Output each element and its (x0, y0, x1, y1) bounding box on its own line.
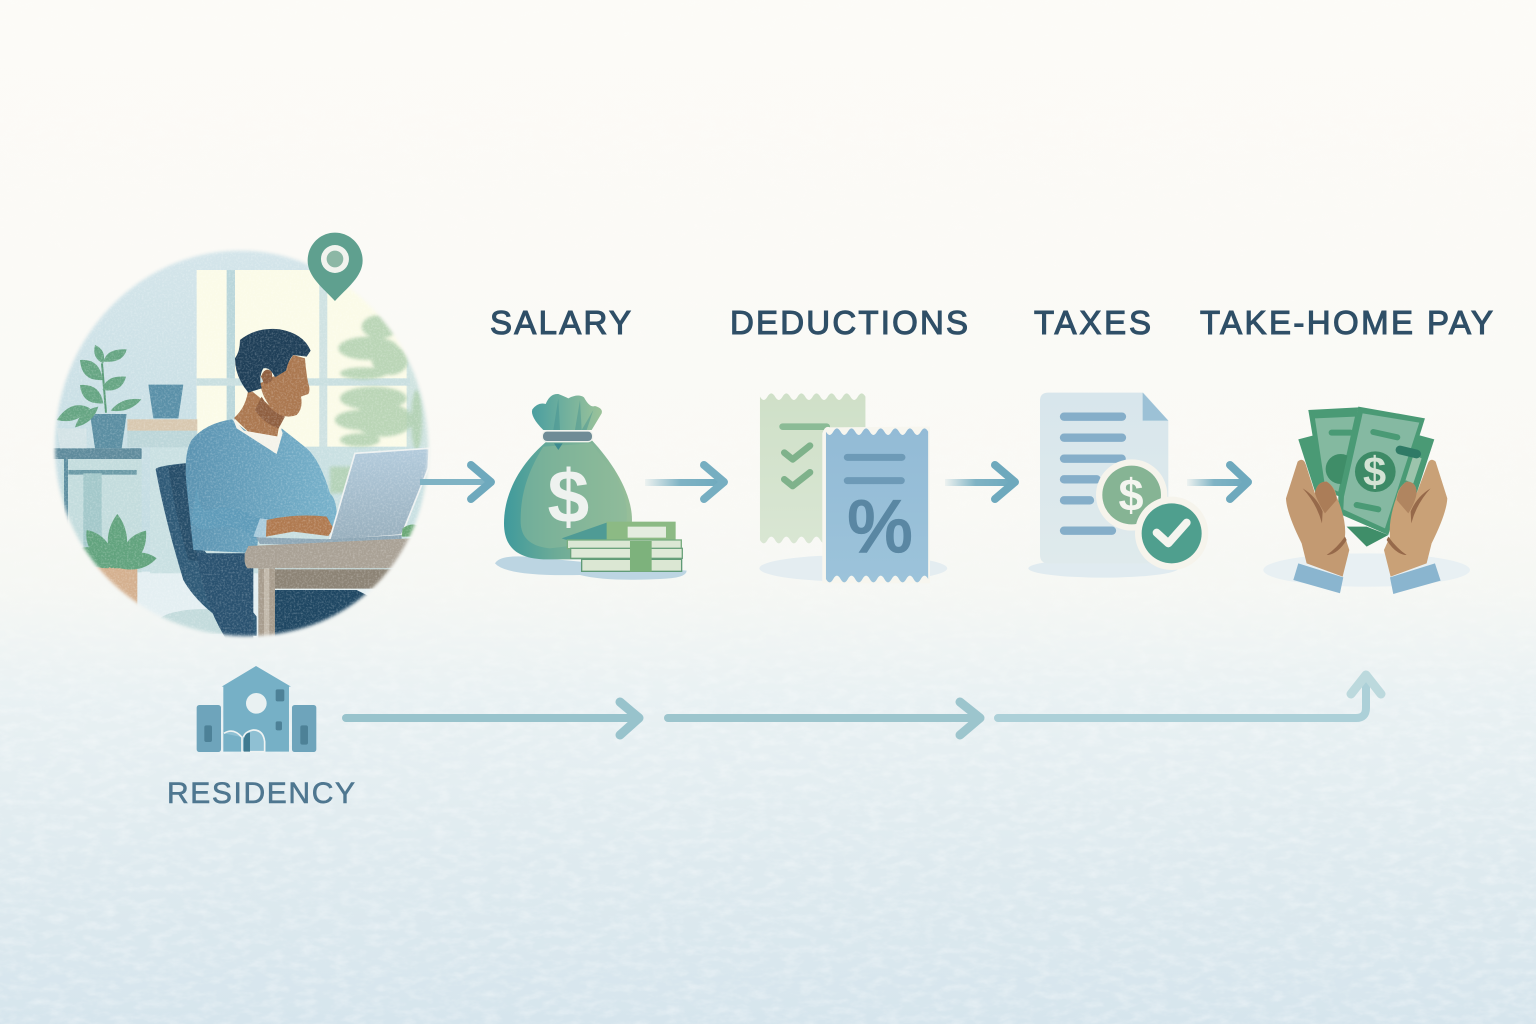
dollar coin: $ (1118, 470, 1144, 521)
cash stack (562, 522, 682, 572)
floor shadow (161, 609, 222, 634)
arrow: residence scene to salary (420, 465, 491, 499)
hair (235, 329, 311, 393)
bag body (504, 440, 632, 559)
office chair (156, 463, 257, 636)
blue receipt (822, 427, 930, 583)
dollar coin (1096, 459, 1167, 531)
heading: salary: SALARY (490, 304, 631, 341)
document shadow (1028, 559, 1178, 578)
bag shadow (495, 556, 687, 580)
icon: residency building (197, 666, 316, 752)
neck (234, 392, 282, 436)
check coin (1135, 497, 1208, 570)
bag ruffle (532, 394, 602, 430)
arrow: residency to deductions level (346, 702, 639, 735)
icon: tax document with coin and check (1028, 393, 1208, 578)
paper background (0, 612, 1536, 1024)
arrow: residency to taxes level (668, 702, 980, 735)
hands (266, 516, 333, 537)
percent sign: % (847, 485, 913, 567)
dollar sign: $ (547, 455, 589, 539)
label: residency: RESIDENCY (167, 777, 355, 810)
banknotes: $ (1363, 448, 1386, 495)
document page (1040, 393, 1168, 563)
infographic canvas (0, 232, 1536, 1024)
receipts shadow (759, 555, 947, 582)
heading: take-home pay: TAKE-HOME PAY (1200, 304, 1493, 341)
icon: hands holding banknotes (1263, 407, 1470, 594)
panel: person working at a laptop in a round scene (52, 232, 430, 638)
laptop (329, 448, 429, 541)
arrow: taxes to take-home pay (1187, 465, 1248, 499)
icon: money bag with cash (495, 394, 687, 580)
hands shadow (1263, 553, 1470, 587)
heading: taxes: TAXES (1034, 304, 1151, 341)
right hand (1384, 460, 1447, 594)
green receipt (760, 393, 865, 543)
arrow: deductions to taxes (945, 465, 1015, 499)
arrow: residency up to take-home pay (998, 675, 1381, 718)
legs (206, 553, 254, 638)
heading: deductions: DEDUCTIONS (730, 304, 968, 341)
left hand (1286, 460, 1349, 593)
icon: deduction receipts (759, 393, 947, 583)
face (260, 355, 309, 417)
arrow: salary to deductions (645, 465, 724, 499)
sweater (186, 419, 337, 553)
desk (244, 538, 413, 568)
icon: location pin (308, 233, 363, 301)
banknotes (1298, 407, 1434, 547)
